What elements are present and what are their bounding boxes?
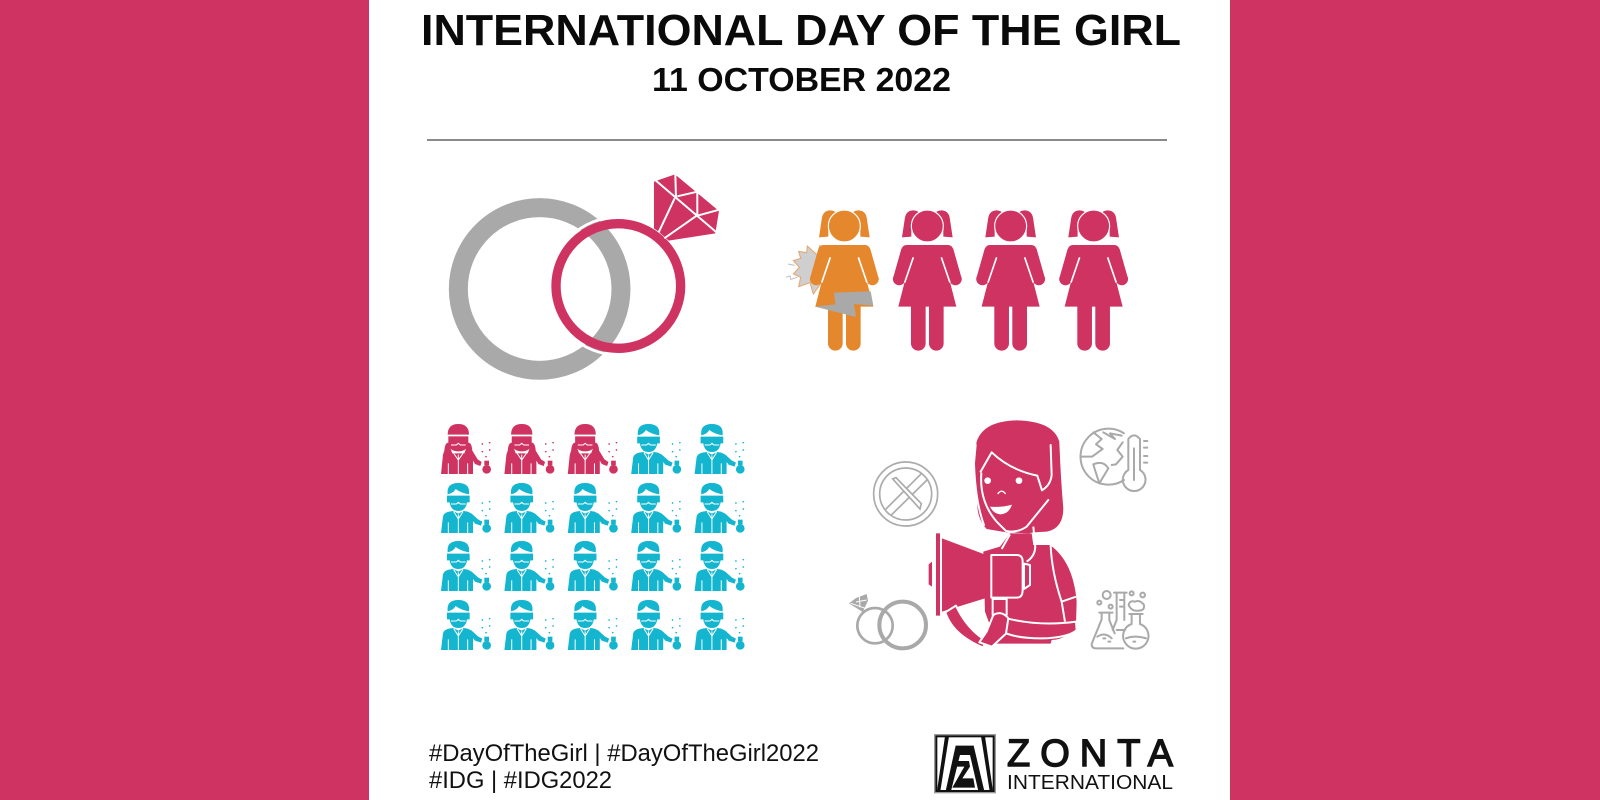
title: INTERNATIONAL DAY OF THE GIRL xyxy=(421,6,1181,55)
hashtags: #IDG | #IDG2022 xyxy=(429,767,612,794)
pictogram: grid of 20 scientists xyxy=(441,424,745,650)
logo: Zonta International: INTERNATIONAL xyxy=(1007,771,1173,794)
megaphone xyxy=(929,533,991,616)
girl 3 xyxy=(976,210,1045,351)
icon: wedding rings with diamond xyxy=(458,174,719,370)
illustration: girl with megaphone xyxy=(929,420,1077,648)
icon: lightning tear on dress xyxy=(815,291,873,317)
logo: Zonta International xyxy=(935,733,1174,794)
hair and face xyxy=(974,420,1063,533)
date subtitle: 11 OCTOBER 2022 xyxy=(652,61,951,98)
girl 4 xyxy=(1059,210,1128,351)
icon: crossed-out knife xyxy=(874,462,938,526)
icon: burst on girl's arm xyxy=(793,245,823,294)
white central panel xyxy=(369,0,1230,800)
pictogram: four girls, one highlighted xyxy=(786,210,1128,351)
icon: small rings xyxy=(849,594,926,648)
arms and hands xyxy=(943,600,993,645)
icon: lab flasks xyxy=(1092,591,1148,649)
logo wordmark: ZONTA xyxy=(1007,733,1174,775)
girl 2 xyxy=(893,210,962,351)
hashtags xyxy=(429,740,819,794)
icon: globe and thermometer xyxy=(1081,429,1147,491)
torso xyxy=(983,533,1077,644)
hashtags: #DayOfTheGirl | #DayOfTheGirl2022 xyxy=(429,740,819,767)
girl 1 orange xyxy=(810,210,879,351)
logo mark xyxy=(935,735,995,793)
divider xyxy=(427,139,1167,141)
